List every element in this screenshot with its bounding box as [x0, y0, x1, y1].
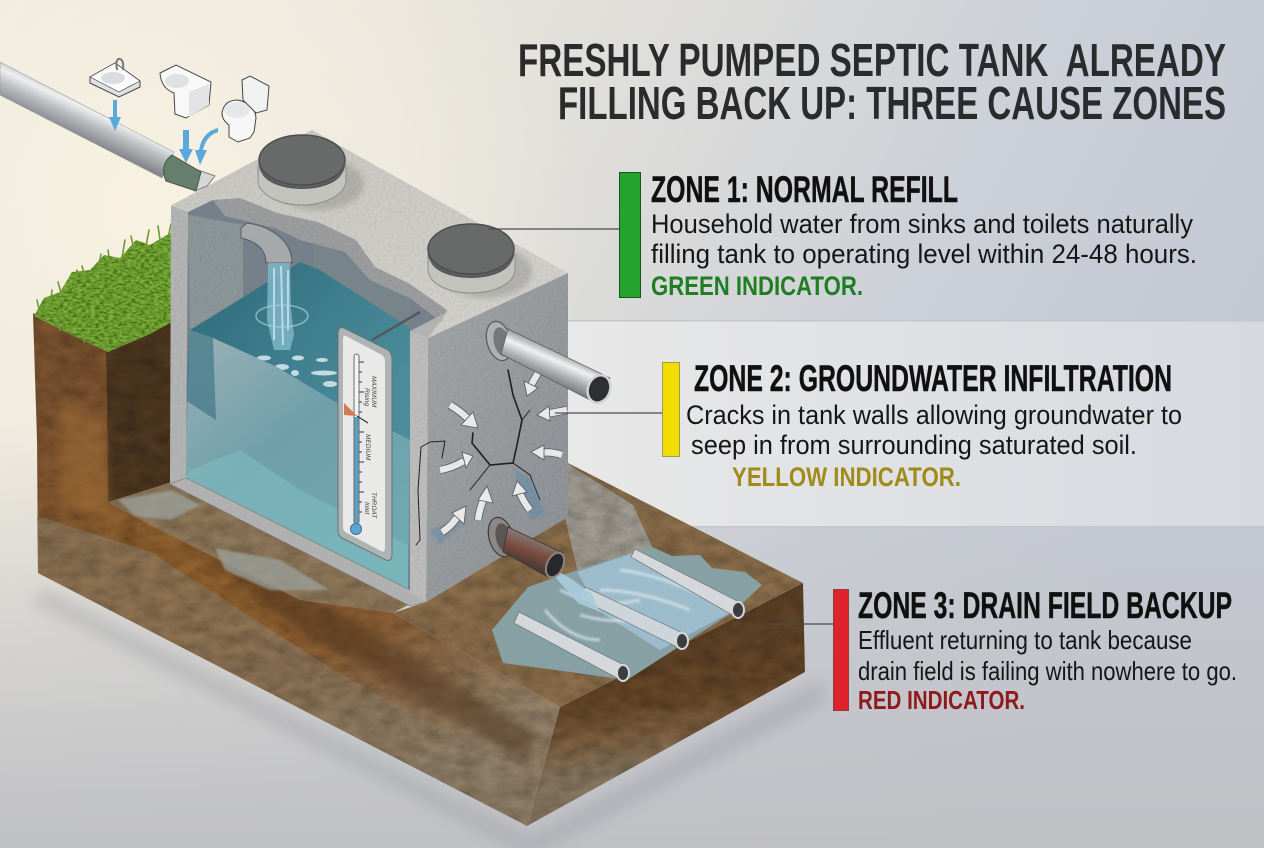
left front post — [170, 205, 188, 484]
label: yellow indicator: YELLOW INDICATOR. — [732, 462, 961, 492]
pipe coupling — [164, 155, 201, 191]
soil right face — [527, 583, 805, 826]
text: zone 2 description: Cracks in tank walls allowing groundwater to — [686, 400, 1182, 430]
drain pipe 2 — [578, 587, 688, 649]
illustration: main sewer inlet pipe — [0, 62, 215, 191]
thermometer labels — [363, 376, 377, 519]
icon: toilet — [222, 76, 269, 142]
thermometer scale — [359, 362, 364, 512]
inlet elbow pipe — [241, 223, 292, 263]
thermometer labels: THROAT — [370, 492, 377, 519]
drain pipe 3 — [631, 549, 744, 618]
soil dark seam — [190, 545, 535, 765]
arrow: toilet flow — [195, 128, 218, 165]
right wall cut edge — [410, 331, 428, 602]
panel: zone 2 light band — [520, 320, 1264, 528]
right wall outer face — [426, 273, 568, 602]
arrow: sink flow — [109, 100, 121, 131]
water highlights — [257, 356, 337, 387]
soil orange patch — [60, 400, 130, 530]
drain pipe 1 — [514, 612, 629, 681]
thermometer labels: Rising — [363, 388, 370, 406]
arrow: basin flow — [179, 130, 193, 163]
thermometer column — [354, 354, 359, 524]
gravel patch behind tank — [566, 463, 652, 572]
inlet water stream — [267, 263, 294, 350]
illustration: cutaway soil block — [33, 224, 805, 826]
bottom rim — [170, 478, 427, 606]
label: red indicator: RED INDICATOR. — [858, 685, 1025, 715]
water body front — [185, 330, 410, 590]
icon: sink — [90, 59, 140, 97]
thermometer labels: Inlet — [363, 502, 370, 515]
illustration: upper outlet pipe — [482, 319, 614, 406]
text: zone 3 description — [858, 625, 1237, 686]
access lid 2 — [428, 224, 532, 298]
indicator: green — [620, 172, 640, 298]
infiltration arrows — [440, 373, 567, 532]
title — [518, 34, 1226, 129]
indicator: red — [834, 590, 848, 710]
tank top slab — [172, 130, 568, 338]
ground surface right of tank — [393, 463, 803, 707]
text: zone 3 description: Effluent returning to tank because — [858, 625, 1192, 655]
icon: pedestal basin — [160, 65, 211, 118]
broken slab edge — [213, 198, 447, 322]
indicator: yellow — [662, 362, 680, 456]
leader lines — [488, 229, 833, 624]
text: zone 1 description — [651, 209, 1197, 269]
panel: zone 2 — [662, 358, 1182, 492]
cracks and seepage — [416, 370, 540, 545]
text: zone 1 description: Household water from sinks and toilets naturally — [651, 209, 1193, 239]
soil inner dark face — [106, 322, 172, 504]
ground shadow — [30, 590, 830, 848]
soil front face — [33, 313, 560, 826]
illustration: drain field — [492, 546, 762, 681]
text: zone 2 description: seep in from surrounding saturated soil. — [691, 430, 1137, 460]
illustration: concrete septic tank — [170, 130, 568, 606]
heading: zone 1: ZONE 1: NORMAL REFILL — [651, 169, 958, 210]
thermometer level gauge — [338, 312, 420, 560]
wet patches on ledge — [118, 490, 330, 590]
saturated water pool — [492, 546, 762, 680]
thermometer labels: MEDIUM — [364, 434, 371, 461]
text: zone 2 description — [686, 400, 1182, 460]
panel: zone 1 — [620, 169, 1197, 301]
access lid 1 — [258, 135, 364, 210]
interior walls — [185, 200, 447, 592]
label: green indicator: GREEN INDICATOR. — [651, 271, 863, 301]
thermometer labels: MAXIMUM — [370, 376, 377, 408]
soil strata band — [37, 516, 535, 826]
ledge surface in front of tank — [108, 482, 412, 613]
illustration: rusty lower pipe with outflow — [484, 515, 600, 612]
thermometer level pointer — [344, 403, 357, 416]
grass — [34, 224, 172, 352]
water surface — [190, 262, 410, 440]
panel: zone 3 — [834, 585, 1237, 715]
text: zone 1 description: filling tank to operating level within 24-48 hours. — [651, 239, 1197, 269]
